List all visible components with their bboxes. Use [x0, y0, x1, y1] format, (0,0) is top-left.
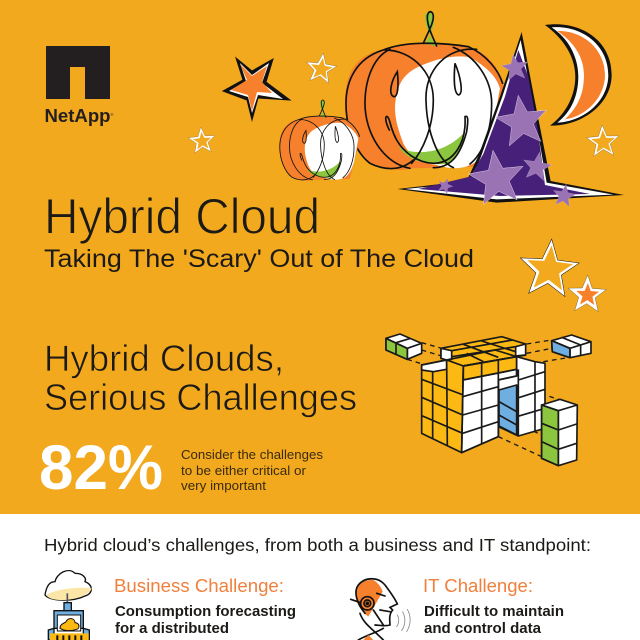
left face — [422, 360, 463, 453]
statistic description: Consider the challenges — [181, 448, 323, 462]
top of cube — [441, 337, 526, 366]
star: small left — [188, 126, 216, 153]
text: business challenge body — [115, 604, 296, 637]
right floating block — [552, 335, 591, 358]
star: lower large — [517, 237, 581, 298]
white lower band — [0, 514, 640, 640]
witch hat — [398, 32, 624, 203]
text: IT challenge body: and control data — [424, 621, 542, 637]
icon: person with headset — [351, 579, 410, 640]
heading: IT challenge: IT Challenge: — [423, 575, 533, 596]
green tower — [542, 399, 577, 466]
left floating block — [386, 334, 422, 359]
hat stars — [436, 52, 577, 208]
statistic: 82%: 82% — [39, 433, 163, 503]
title: Hybrid Cloud — [44, 188, 320, 244]
heading: business challenge: Business Challenge: — [114, 575, 284, 596]
connector dashes — [407, 340, 570, 457]
statistic description: to be either critical or — [181, 464, 306, 478]
section heading: Serious Challenges — [44, 377, 357, 418]
text: IT challenge body: Difficult to maintain — [424, 604, 564, 620]
text: IT challenge body — [424, 604, 564, 637]
text: business challenge body: Consumption forecasting — [115, 604, 296, 620]
crescent moon — [545, 24, 612, 126]
star: small top — [304, 51, 338, 84]
star: lower small orange — [567, 274, 607, 312]
statistic description: very important — [181, 479, 267, 493]
subtitle: Taking The 'Scary' Out of The Cloud — [44, 245, 474, 273]
NetApp logo: NetApp — [44, 106, 110, 126]
section heading: Hybrid Clouds, — [44, 338, 284, 379]
front face — [462, 357, 517, 453]
star: small right — [586, 124, 620, 157]
cube illustration — [386, 334, 591, 466]
NetApp logo: ® — [110, 112, 114, 117]
big pumpkin — [345, 11, 503, 170]
section heading — [44, 338, 357, 418]
back right block — [498, 357, 545, 436]
small pumpkin — [279, 100, 360, 181]
icon: cloud over building — [45, 571, 92, 640]
section intro text: Hybrid cloud’s challenges, from both a business and IT standpoint: — [44, 535, 591, 555]
text: business challenge body: for a distributed — [115, 621, 229, 637]
statistic description — [181, 448, 323, 493]
star: large orange — [223, 58, 290, 120]
NetApp logo — [44, 46, 114, 126]
